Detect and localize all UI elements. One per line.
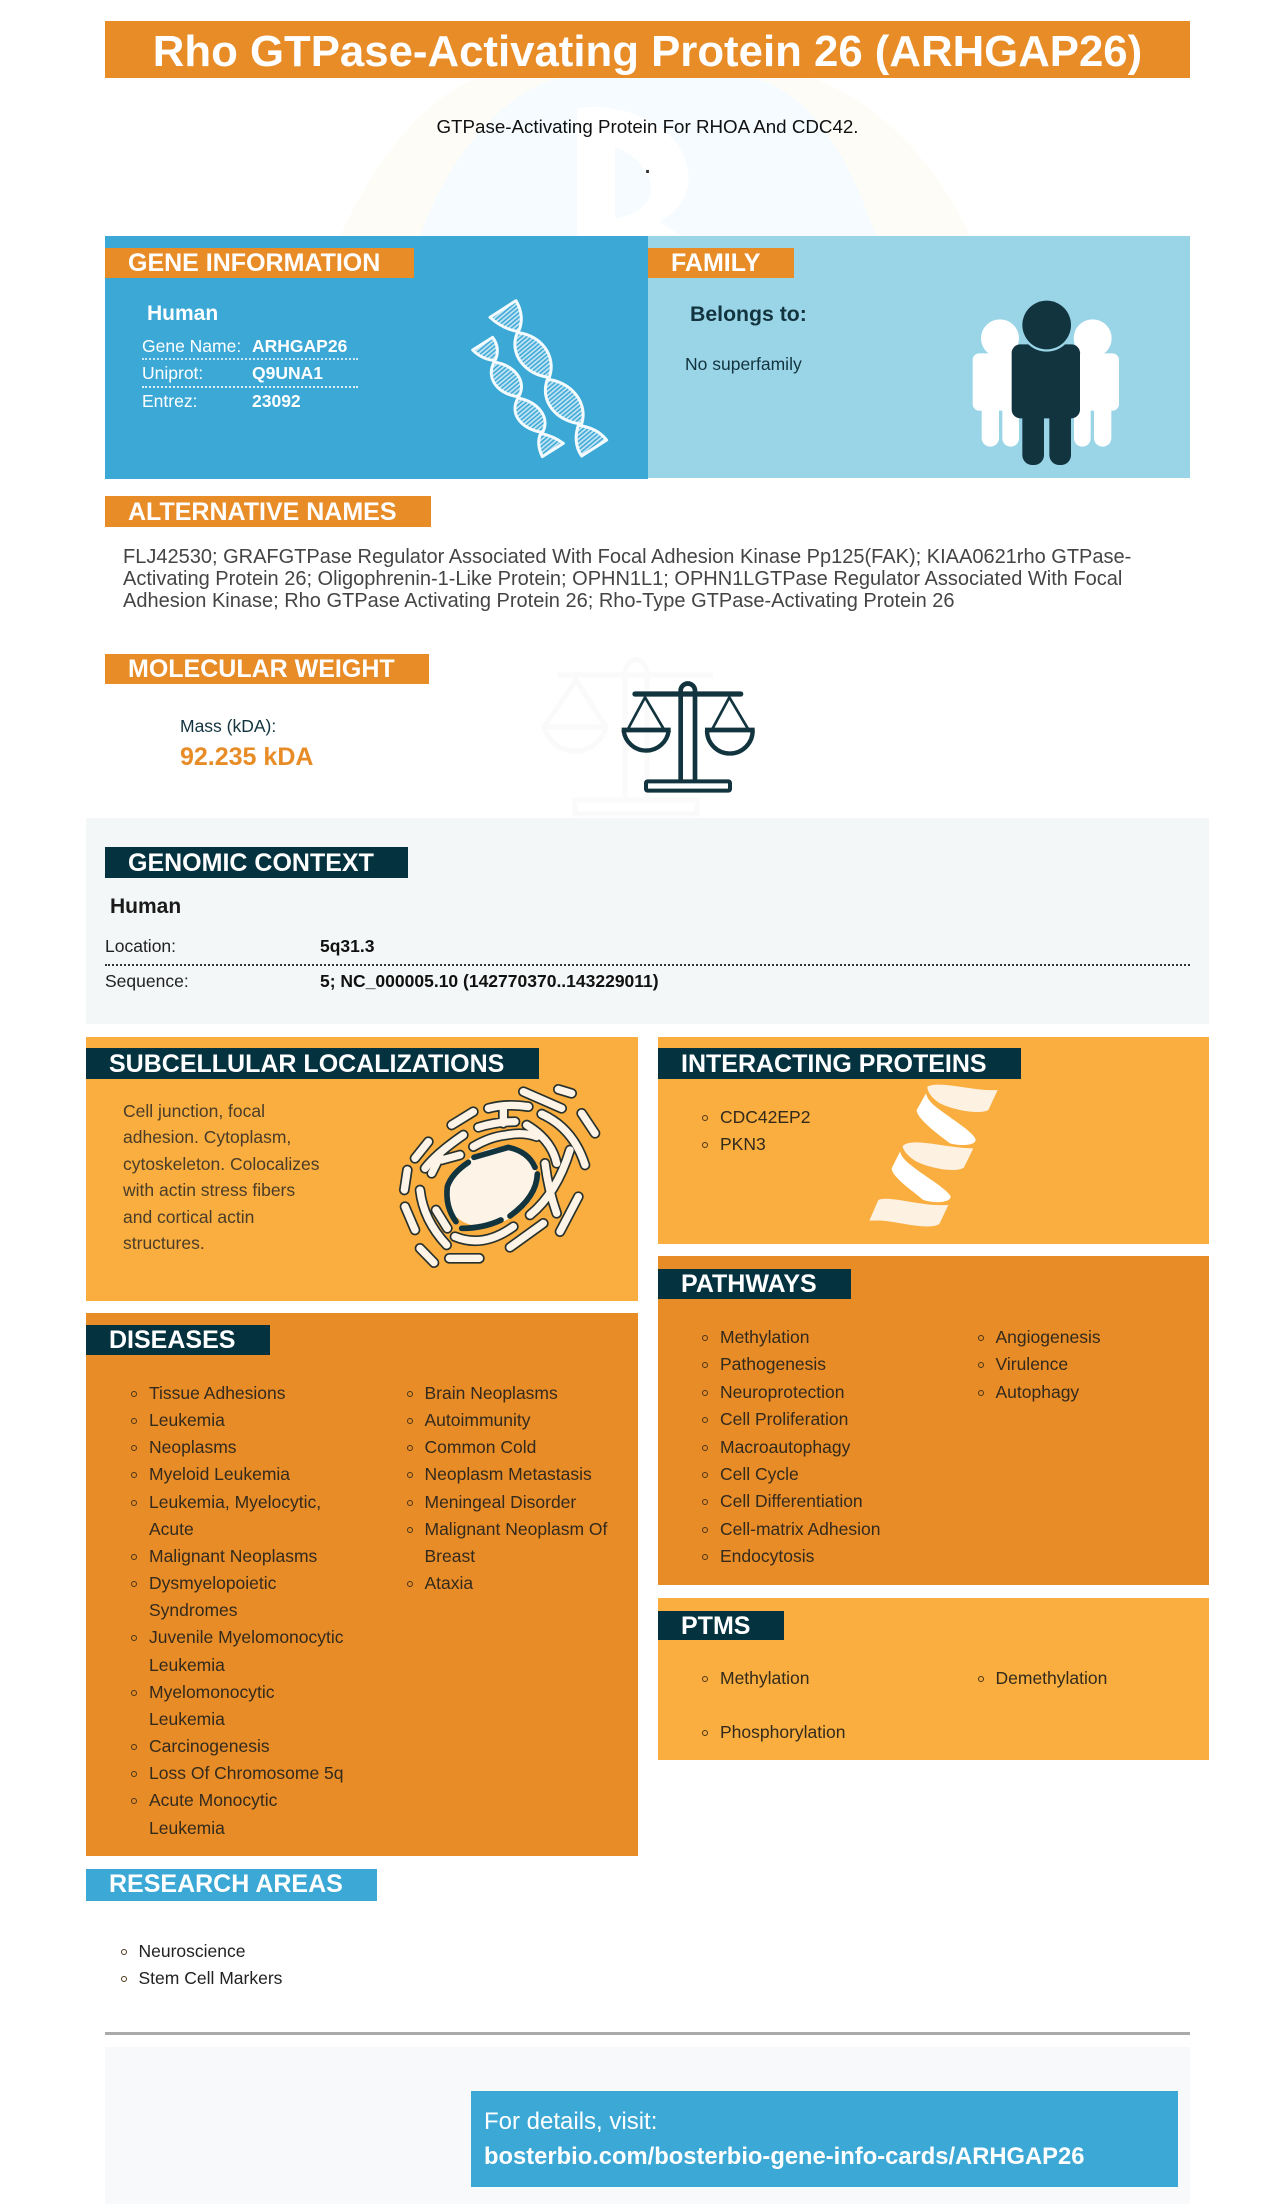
diseases list column 1: Leukemia [149, 1655, 225, 1675]
pathways list column 1 [702, 1327, 880, 1566]
diseases list column 2: Common Cold [424, 1437, 536, 1457]
alternative names text: Adhesion Kinase; Rho GTPase Activating Protein 26; Rho-Type GTPase-Activating Protein 26 [123, 590, 955, 612]
diseases list column 1: Syndromes [149, 1600, 238, 1620]
research areas list [121, 1941, 282, 1988]
callout url: bosterbio.com/bosterbio-gene-info-cards/ARHGAP26 [484, 2143, 1084, 2170]
panel: pathways [658, 1256, 1209, 1585]
diseases list column 1: Acute [149, 1519, 194, 1539]
research areas list: Neuroscience [138, 1941, 246, 1961]
belongs to label: Belongs to: [690, 302, 807, 326]
background watermark logo [340, 78, 970, 236]
heading: family [648, 248, 794, 278]
diseases list column 1: Leukemia [149, 1709, 225, 1729]
diseases list column 2: Autoimmunity [424, 1410, 531, 1430]
icon: protein ribbon [869, 1084, 998, 1226]
heading: alternative names: ALTERNATIVE NAMES [128, 498, 397, 526]
mass label: Mass (kDA): [180, 716, 276, 736]
footer divider [105, 2032, 1190, 2035]
ptms list column 1: Methylation [720, 1668, 810, 1688]
diseases list column 2: Breast [424, 1546, 475, 1566]
heading: subcellular localizations: SUBCELLULAR LOCALIZATIONS [109, 1050, 504, 1078]
uniprot row: Uniprot: [142, 363, 203, 383]
diseases list column 1: Myelomonocytic [149, 1682, 274, 1702]
heading: family: FAMILY [671, 249, 760, 277]
localization text: cytoskeleton. Colocalizes [123, 1154, 319, 1174]
icon: cell organelles [399, 1084, 600, 1268]
diseases list column 2: Brain Neoplasms [424, 1383, 558, 1403]
heading: genomic context: GENOMIC CONTEXT [128, 849, 374, 877]
pathways list column 1: Macroautophagy [720, 1437, 850, 1457]
pathways list column 1: Methylation [720, 1327, 810, 1347]
diseases list column 2: Ataxia [424, 1573, 473, 1593]
localization text: and cortical actin [123, 1207, 254, 1227]
pathways list column 2: Virulence [996, 1354, 1068, 1374]
title: Rho GTPase-Activating Protein 26 (ARHGAP26) [153, 27, 1142, 76]
location row [105, 934, 1190, 966]
sequence row [105, 971, 659, 991]
icon: ghost scale [540, 655, 730, 820]
alternative names text: FLJ42530; GRAFGTPase Regulator Associated With Focal Adhesion Kinase Pp125(FAK); KIAA0621rho GTPase- [123, 546, 1131, 568]
pathways list column 1: Cell Differentiation [720, 1491, 863, 1511]
diseases list column 1: Dysmyelopoietic [149, 1573, 276, 1593]
diseases list column 1: Myeloid Leukemia [149, 1464, 290, 1484]
research areas list: Stem Cell Markers [138, 1968, 282, 1988]
panel: footer [105, 2047, 1190, 2204]
pathways list column 1: Endocytosis [720, 1546, 814, 1566]
alternative names text [123, 546, 1131, 612]
diseases list column 1: Leukemia [149, 1410, 225, 1430]
panel: interacting proteins [658, 1037, 1209, 1244]
gene name row [142, 334, 358, 360]
diseases list column 1: Neoplasms [149, 1437, 237, 1457]
uniprot row: Q9UNA1 [252, 363, 323, 383]
interacting proteins list: PKN3 [720, 1134, 766, 1154]
diseases list column 1: Loss Of Chromosome 5q [149, 1763, 344, 1783]
location row: Location: [105, 936, 176, 956]
panel: genomic context [86, 818, 1209, 1024]
species label: Human [147, 302, 218, 325]
localization text [123, 1101, 319, 1253]
callout: details link [471, 2091, 1178, 2187]
ptms list column 2: Demethylation [996, 1668, 1107, 1688]
gene name row: Gene Name: [142, 336, 241, 356]
panel: gene information [105, 236, 648, 479]
heading: research areas: RESEARCH AREAS [109, 1870, 343, 1898]
panel: ptms [658, 1598, 1209, 1760]
panel: diseases [86, 1313, 638, 1856]
ptms list column 1 [702, 1668, 846, 1742]
ptms list column 1: Phosphorylation [720, 1722, 846, 1742]
pathways list column 2: Autophagy [996, 1382, 1079, 1402]
heading: diseases: DISEASES [109, 1326, 235, 1354]
pathways list column 1: Neuroprotection [720, 1382, 845, 1402]
panel: genomic context: 5; NC_000005.10 (142770370..143229011) [320, 971, 659, 991]
panel: subcellular localizations [86, 1037, 638, 1301]
heading: molecular weight: MOLECULAR WEIGHT [128, 655, 395, 683]
diseases list column 1: Leukemia, Myelocytic, [149, 1492, 321, 1512]
diseases list column 1: Juvenile Myelomonocytic [149, 1627, 344, 1647]
pathways list column 1: Cell-matrix Adhesion [720, 1519, 880, 1539]
diseases list column 1 [131, 1383, 344, 1838]
heading: gene information: GENE INFORMATION [128, 249, 380, 277]
diseases list column 2: Meningeal Disorder [424, 1492, 576, 1512]
interacting proteins list: CDC42EP2 [720, 1107, 810, 1127]
diseases list column 1: Malignant Neoplasms [149, 1546, 317, 1566]
diseases list column 1: Leukemia [149, 1818, 225, 1838]
icon: balance scale [622, 681, 755, 793]
subtitle dot: . [645, 156, 650, 178]
diseases list column 1: Tissue Adhesions [149, 1383, 286, 1403]
no superfamily text: No superfamily [685, 354, 802, 374]
pathways list column 1: Cell Cycle [720, 1464, 799, 1484]
subtitle: GTPase-Activating Protein For RHOA And CDC42. [436, 116, 859, 137]
uniprot row [142, 361, 358, 388]
heading: ptms [658, 1611, 784, 1640]
localization text: structures. [123, 1233, 205, 1253]
diseases list column 2: Malignant Neoplasm Of [424, 1519, 607, 1539]
pathways list column 2 [978, 1327, 1101, 1402]
icon: dna [471, 299, 608, 458]
localization text: with actin stress fibers [123, 1180, 295, 1200]
pathways list column 1: Pathogenesis [720, 1354, 826, 1374]
species label: Human [110, 895, 181, 918]
heading: ptms: PTMS [681, 1612, 750, 1640]
localization text: Cell junction, focal [123, 1101, 265, 1121]
interacting proteins list [702, 1107, 810, 1154]
panel: family [648, 236, 1190, 478]
pathways list column 2: Angiogenesis [996, 1327, 1101, 1347]
sequence row: Sequence: [105, 971, 189, 991]
alternative names text: Activating Protein 26; Oligophrenin-1-Like Protein; OPHN1L1; OPHN1LGTPase Regulator Associated With Focal [123, 568, 1122, 590]
mass value: 92.235 kDA [180, 743, 313, 771]
icon: people [972, 300, 1119, 465]
heading: diseases [86, 1325, 270, 1355]
heading: pathways: PATHWAYS [681, 1270, 817, 1298]
entrez row: 23092 [252, 391, 301, 411]
localization text: adhesion. Cytoplasm, [123, 1127, 291, 1147]
heading: interacting proteins: INTERACTING PROTEINS [681, 1050, 987, 1078]
entrez row [142, 391, 301, 411]
heading: pathways [658, 1269, 851, 1299]
entrez row: Entrez: [142, 391, 197, 411]
diseases list column 1: Acute Monocytic [149, 1790, 277, 1810]
diseases list column 2: Neoplasm Metastasis [424, 1464, 592, 1484]
location row: 5q31.3 [320, 936, 374, 956]
diseases list column 2 [407, 1383, 608, 1593]
pathways list column 1: Cell Proliferation [720, 1409, 848, 1429]
gene name row: ARHGAP26 [252, 336, 347, 356]
callout label: For details, visit: [484, 2108, 657, 2135]
diseases list column 1: Carcinogenesis [149, 1736, 270, 1756]
